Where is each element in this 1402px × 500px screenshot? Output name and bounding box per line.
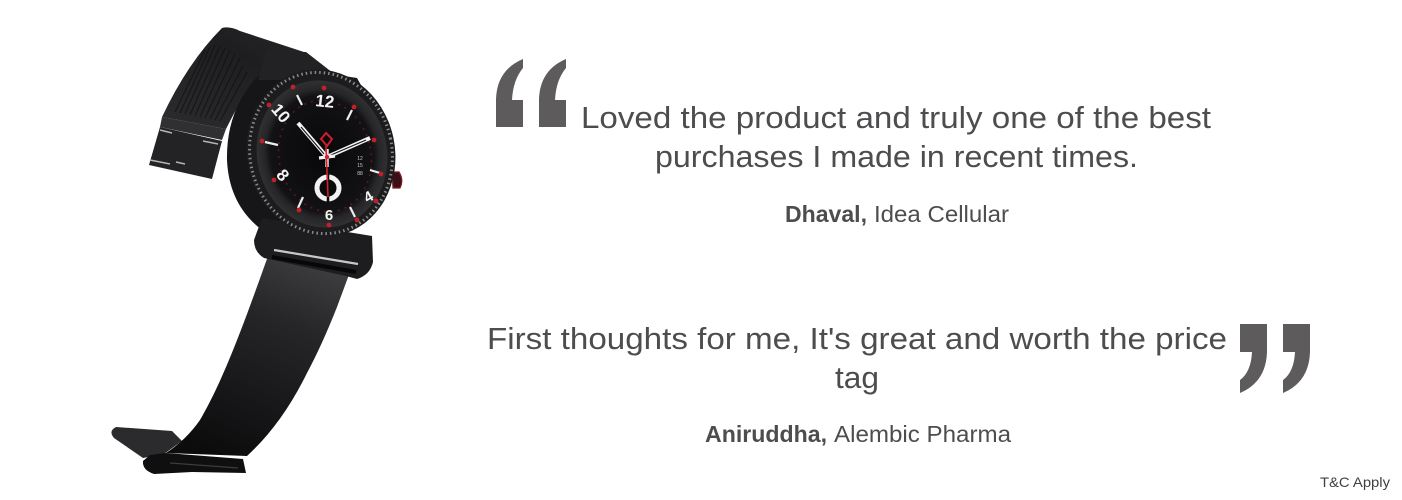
watch dial <box>243 68 401 240</box>
attribution: Dhaval, <box>785 201 867 227</box>
top lug and button <box>258 52 367 103</box>
small date readout: 15 <box>357 163 363 169</box>
upper mesh strap <box>162 27 336 129</box>
lower lug <box>254 218 373 279</box>
attribution: Idea Cellular <box>874 201 1009 227</box>
quote text: Loved the product and truly one of the best <box>581 100 1211 135</box>
attribution <box>705 421 1011 447</box>
quote text: purchases I made in recent times. <box>655 139 1138 174</box>
dial numerals: 12 <box>314 91 335 112</box>
closing quotation mark <box>1240 324 1310 393</box>
fold-over clasp <box>111 427 246 474</box>
clock hands <box>298 123 370 197</box>
attribution: Aniruddha, <box>705 421 827 447</box>
small date readout <box>357 156 363 177</box>
hour ticks <box>265 95 380 217</box>
testimonial 1 <box>496 59 1211 227</box>
dial numerals <box>267 91 377 224</box>
attribution <box>785 201 1009 227</box>
dial numerals: 8 <box>272 166 293 185</box>
quote text: First thoughts for me, It's great and worth the price <box>487 321 1227 356</box>
product: black smartwatch <box>111 27 411 474</box>
lower mesh strap <box>166 256 350 456</box>
opening quotation mark <box>496 59 566 127</box>
upper strap buckle <box>149 117 226 179</box>
watch case side <box>227 76 300 230</box>
dial numerals: 4 <box>361 188 377 207</box>
small date readout: 88 <box>357 171 363 177</box>
quote text <box>581 100 1211 174</box>
sub-dial ring <box>317 174 339 202</box>
dial numerals: 10 <box>267 100 294 127</box>
testimonial 2 <box>487 321 1310 447</box>
terms note: T&C Apply <box>1320 474 1390 490</box>
quote text <box>487 321 1227 395</box>
watch bezel <box>231 55 411 251</box>
crown <box>392 172 402 188</box>
dial numerals: 6 <box>325 207 333 224</box>
red markers <box>260 85 383 227</box>
quote text: tag <box>835 360 879 395</box>
small date readout: 12 <box>357 156 363 162</box>
attribution: Alembic Pharma <box>834 421 1011 447</box>
